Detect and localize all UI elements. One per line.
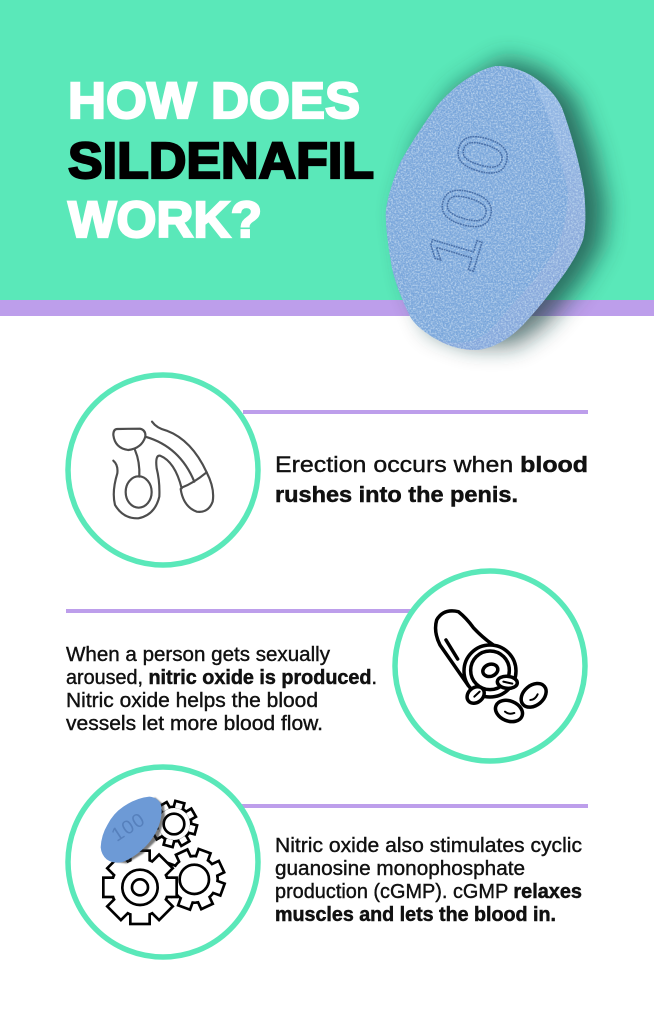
circle bbox=[395, 571, 585, 761]
pill top face bbox=[386, 66, 568, 343]
header background bbox=[0, 0, 654, 300]
title: SILDENAFIL bbox=[68, 132, 374, 189]
text: cGMP: production (cGMP). cGMP relaxes bbox=[275, 881, 582, 903]
icon: penis anatomy bbox=[113, 422, 213, 518]
text: cGMP: muscles and lets the blood in. bbox=[275, 904, 556, 926]
title bbox=[68, 72, 374, 248]
icon: gears and pill bbox=[101, 797, 225, 924]
pill imprint 100: 100 bbox=[411, 125, 526, 280]
panel: erection bbox=[68, 375, 588, 565]
pill body bbox=[386, 66, 585, 350]
text: cGMP: Nitric oxide also stimulates cyclic bbox=[275, 835, 582, 857]
text: cGMP bbox=[275, 835, 582, 926]
circle bbox=[68, 375, 258, 565]
divider line bbox=[240, 804, 588, 808]
pill shadow bbox=[400, 58, 606, 345]
pill imprint: 100 bbox=[108, 809, 150, 846]
panel: cGMP bbox=[68, 767, 588, 957]
text: nitric oxide bbox=[66, 644, 377, 735]
title: HOW DOES bbox=[68, 72, 360, 129]
text: nitric oxide: aroused, nitric oxide is produced. bbox=[66, 667, 377, 689]
text: nitric oxide: vessels let more blood flow. bbox=[66, 713, 323, 735]
divider line bbox=[66, 609, 414, 613]
text: nitric oxide: When a person gets sexually bbox=[66, 644, 330, 666]
icon: large blue pill bbox=[386, 58, 606, 350]
small pill bbox=[101, 797, 162, 863]
large gear bbox=[103, 851, 177, 924]
text: cGMP: guanosine monophosphate bbox=[275, 858, 525, 880]
icon: blood vessel bbox=[436, 611, 551, 726]
divider line bbox=[243, 410, 588, 414]
circle bbox=[68, 767, 258, 957]
text: erection: Erection occurs when blood bbox=[275, 452, 588, 477]
small pill shadow bbox=[113, 797, 165, 863]
small gear bbox=[151, 801, 197, 847]
panel: erection: rushes into the penis. bbox=[275, 482, 518, 507]
purple band bbox=[0, 300, 654, 316]
title: WORK? bbox=[68, 191, 262, 248]
panel: nitric oxide bbox=[66, 571, 585, 761]
medium gear bbox=[164, 849, 225, 910]
text: nitric oxide: Nitric oxide helps the blood bbox=[66, 690, 318, 712]
